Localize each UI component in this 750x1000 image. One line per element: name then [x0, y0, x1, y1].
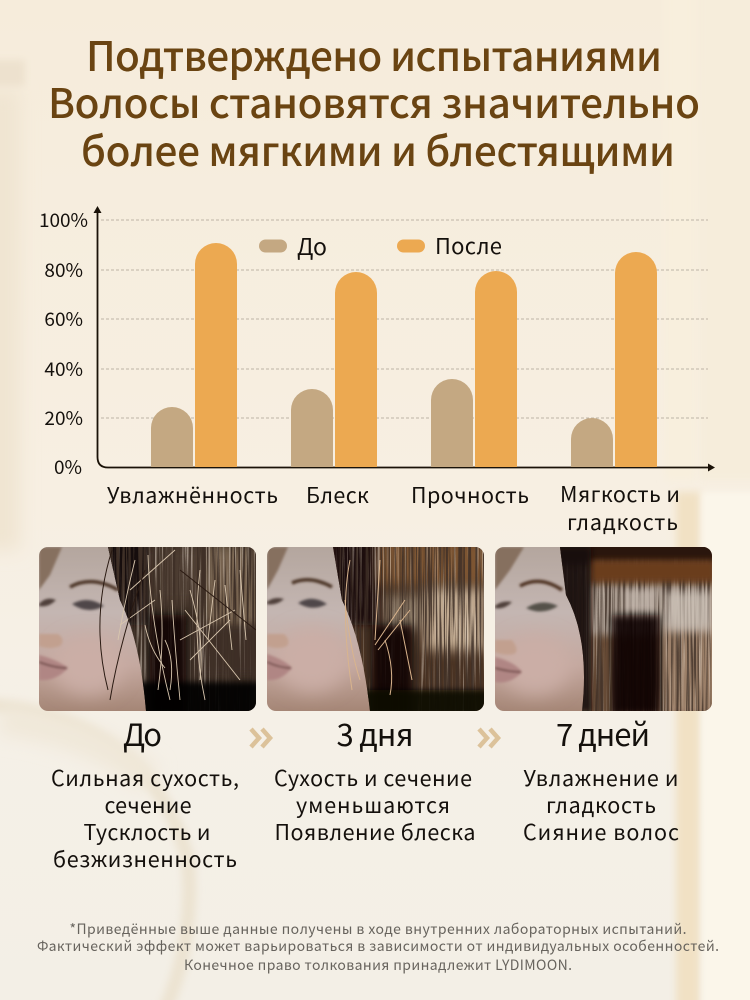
text: before stage: Сильная сухость, — [51, 762, 239, 793]
category labels: Прочность — [411, 479, 529, 510]
text: before stage: сечение — [104, 789, 192, 820]
text: before stage: безжизненность — [53, 843, 237, 874]
text: 7 days stage: Сияние волос — [523, 816, 679, 847]
title: Волосы становятся значительно — [48, 71, 700, 130]
legend: До — [297, 228, 327, 262]
y axis labels: 0% — [54, 453, 82, 480]
category labels: Мягкость и — [560, 478, 680, 509]
footnote — [37, 919, 719, 975]
y axis labels: 60% — [44, 305, 83, 332]
legend: После — [435, 229, 502, 261]
title: Подтверждено испытаниями — [86, 24, 662, 83]
category labels: Увлажнённость — [107, 479, 278, 510]
text: 3 days stage: Сухость и сечение — [274, 762, 472, 793]
category labels — [107, 478, 680, 537]
y axis labels: 40% — [44, 355, 83, 382]
bars: after — [195, 243, 657, 467]
text: 7 days stage — [523, 762, 679, 847]
y axis labels: 20% — [44, 404, 83, 431]
photo: after 3 days — [267, 540, 490, 716]
category labels: гладкость — [567, 506, 678, 537]
footnote: Фактический эффект может варьироваться в зависимости от индивидуальных особенностей. — [37, 936, 719, 956]
text: 3 days stage — [274, 762, 476, 847]
footnote: *Приведённые выше данные получены в ходе внутренних лабораторных испытаний. — [70, 919, 686, 939]
title — [48, 24, 700, 178]
y axis labels: 100% — [39, 206, 88, 233]
bar chart — [39, 206, 715, 537]
arrow: chevrons 2 — [479, 729, 498, 747]
stage heading: before: До — [123, 710, 162, 755]
arrow: chevrons 1 — [251, 729, 270, 747]
text: before stage — [51, 762, 239, 874]
text: before stage: Тусклость и — [84, 816, 210, 847]
stage heading: 3 days: 3 дня — [336, 710, 414, 755]
legend — [259, 228, 502, 262]
photo: after 7 days — [495, 547, 712, 711]
text: 3 days stage: уменьшаются — [296, 789, 450, 820]
y axis labels: 80% — [44, 256, 83, 283]
title: более мягкими и блестящими — [81, 119, 675, 178]
category labels: Блеск — [306, 479, 369, 510]
grid lines and axes — [94, 206, 715, 472]
photo: before — [39, 540, 260, 717]
text: 3 days stage: Появление блеска — [274, 816, 476, 847]
y axis labels — [39, 206, 88, 480]
bars: before — [151, 379, 613, 467]
stage heading: 7 days: 7 дней — [556, 710, 650, 755]
footnote: Конечное право толкования принадлежит LYDIMOON. — [184, 955, 572, 975]
text: 7 days stage: гладкость — [546, 789, 656, 820]
text: 7 days stage: Увлажнение и — [524, 762, 678, 793]
